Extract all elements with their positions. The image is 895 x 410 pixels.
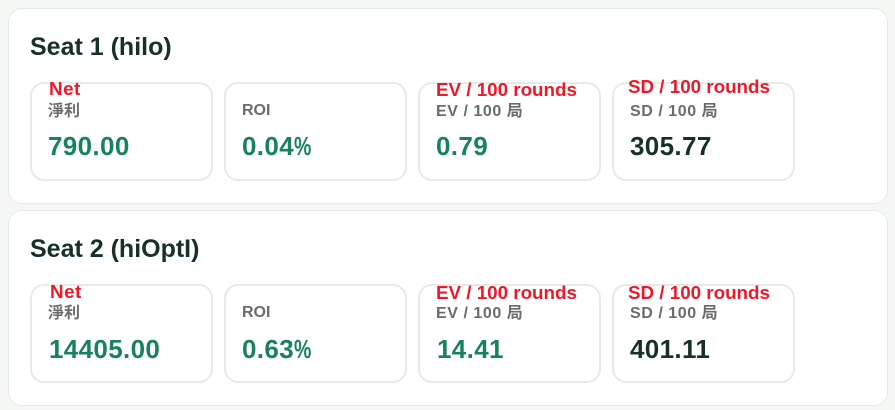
card: ev — [418, 284, 600, 382]
panel: seat 1 — [8, 8, 888, 204]
card: sd — [612, 284, 794, 382]
card: roi — [224, 82, 406, 180]
value: roi: 0.04 — [242, 131, 294, 161]
card: ev — [418, 82, 600, 180]
label: ev: EV / 100 局 — [436, 305, 523, 322]
card: roi — [224, 284, 406, 382]
label: net translation: Net — [49, 78, 81, 99]
value: roi: % — [294, 334, 312, 364]
label: sd translation: SD / 100 rounds — [628, 282, 770, 303]
value: net: 790.00 — [48, 131, 130, 161]
label: ev: EV / 100 局 — [436, 103, 523, 120]
value: roi: 0.63 — [242, 334, 294, 364]
label: roi: ROI — [242, 102, 270, 119]
label: sd translation: SD / 100 rounds — [628, 76, 770, 97]
label: sd: SD / 100 局 — [630, 103, 718, 120]
label: sd: SD / 100 局 — [630, 305, 718, 322]
panel: seat 2 — [8, 210, 888, 406]
label: ev translation: EV / 100 rounds — [436, 282, 577, 303]
label: net: 淨利 — [48, 103, 80, 120]
value: ev: 14.41 — [437, 334, 504, 364]
value: ev: 0.79 — [436, 131, 488, 161]
value: roi: % — [294, 131, 312, 161]
value: sd: 305.77 — [630, 131, 712, 161]
label: net translation: Net — [50, 281, 82, 302]
value: sd: 401.11 — [630, 334, 710, 364]
label: net: 淨利 — [48, 305, 80, 322]
label: ev translation: EV / 100 rounds — [436, 79, 577, 100]
card: net — [30, 284, 212, 382]
card: net — [30, 82, 212, 180]
heading: seat 1: Seat 1 (hilo) — [30, 33, 172, 61]
heading: seat 2: Seat 2 (hiOptI) — [30, 235, 199, 263]
value: net: 14405.00 — [49, 334, 160, 364]
card: sd — [612, 82, 794, 180]
label: roi: ROI — [242, 304, 270, 321]
